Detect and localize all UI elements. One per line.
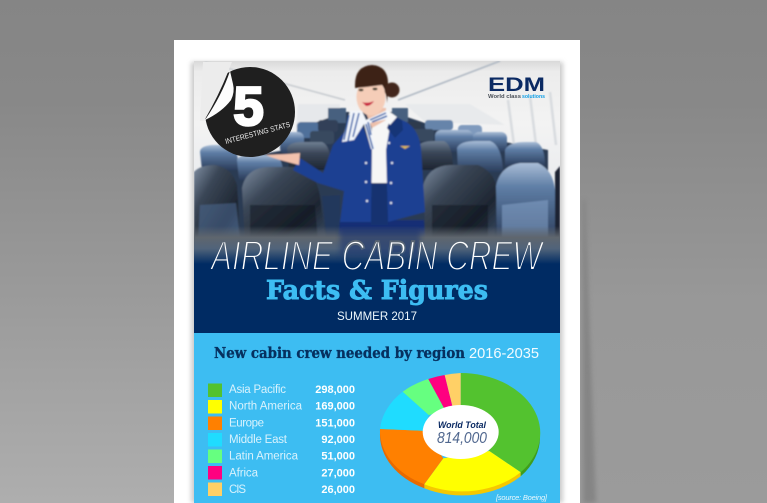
eyes and smile bbox=[358, 89, 364, 91]
legend row: North America: North America bbox=[229, 401, 303, 413]
donut chart bbox=[380, 373, 540, 495]
legend row: CIS bbox=[208, 482, 355, 496]
legend row: Asia Pacific bbox=[208, 384, 355, 397]
jacket buttons and wings pin bbox=[365, 142, 393, 204]
white sheet bbox=[174, 40, 580, 503]
hero photo: airplane cabin with flight attendant bbox=[194, 61, 560, 272]
slice: CIS bbox=[445, 373, 461, 407]
legend row: Africa: 27,000 bbox=[321, 467, 355, 479]
donut 3D edge bbox=[380, 429, 540, 495]
panel heading: New cabin crew needed by region bbox=[214, 344, 465, 362]
cut-away at peel bbox=[200, 62, 232, 121]
hair bbox=[355, 65, 388, 103]
jacket left panel and sleeve bbox=[293, 124, 372, 222]
slice: North America bbox=[424, 451, 521, 491]
jacket right panel and sleeve bbox=[386, 115, 425, 222]
legend row: North America bbox=[208, 400, 355, 414]
world total value: 814,000 bbox=[437, 430, 487, 447]
legend row: CIS: 26,000 bbox=[321, 484, 355, 496]
legend bbox=[208, 384, 355, 496]
striped scarf bbox=[342, 110, 388, 150]
legend row: Asia Pacific: Asia Pacific bbox=[229, 384, 286, 396]
legend row: Europe: Europe bbox=[229, 417, 264, 429]
slice: Africa bbox=[428, 375, 453, 412]
sticker: 5 interesting stats bbox=[200, 62, 295, 157]
slice: Asia Pacific bbox=[461, 373, 540, 472]
slice: Middle East bbox=[380, 392, 429, 431]
skirt bbox=[339, 220, 425, 234]
shirt bbox=[370, 120, 390, 184]
open palm bbox=[266, 153, 300, 165]
far rows of seats bbox=[280, 108, 507, 154]
legend row: Europe: 151,000 bbox=[315, 417, 355, 429]
face bbox=[356, 78, 386, 116]
legend row: Middle East: 92,000 bbox=[321, 434, 355, 446]
legend row: Latin America: Latin America bbox=[229, 451, 299, 463]
legend row: Latin America: 51,000 bbox=[321, 451, 355, 463]
peeled corner bbox=[205, 71, 234, 120]
neck and collar bbox=[364, 108, 386, 128]
legend row: Latin America bbox=[208, 450, 355, 463]
logo: EDM: World class bbox=[488, 94, 521, 100]
panel heading: 2016-2035 bbox=[469, 345, 539, 362]
front row seats bbox=[194, 163, 560, 242]
donut hole bbox=[423, 405, 499, 459]
panel: new cabin crew by region bbox=[194, 333, 560, 503]
logo: EDM: solutions bbox=[522, 94, 545, 100]
legend row: Asia Pacific: 298,000 bbox=[315, 384, 355, 396]
legend row: Middle East: Middle East bbox=[229, 434, 288, 446]
legend row: Africa: Africa bbox=[229, 467, 259, 479]
interesting stats label: INTERESTING STATS bbox=[224, 120, 291, 146]
bottom fade of photo bbox=[194, 227, 560, 264]
world total label: World Total bbox=[438, 420, 486, 430]
title: Airline Cabin Crew: AIRLINE CABIN CREW bbox=[209, 232, 545, 279]
legend row: Middle East bbox=[208, 433, 355, 446]
cabin ceiling and window wall bbox=[205, 61, 556, 145]
legend row: CIS: CIS bbox=[229, 484, 246, 496]
legend row: North America: 169,000 bbox=[315, 401, 355, 413]
slice: Europe bbox=[380, 429, 443, 484]
middle rows of seats bbox=[199, 140, 546, 180]
legend row: Africa bbox=[208, 466, 355, 480]
poster shadow bbox=[191, 62, 563, 503]
subtitle: Facts & Figures: Facts & Figures bbox=[266, 276, 488, 306]
legend row: Europe bbox=[208, 416, 355, 430]
jacket skirt front bbox=[371, 183, 388, 225]
logo: EDM: EDM bbox=[488, 75, 545, 96]
source note: [source: Boeing] bbox=[495, 493, 548, 502]
flight attendant bbox=[266, 64, 426, 234]
logo: EDM bbox=[488, 75, 545, 100]
dark seat backing bbox=[226, 110, 549, 237]
date: Summer 2017: SUMMER 2017 bbox=[337, 309, 417, 323]
number 5: 5 bbox=[233, 75, 264, 137]
navy title band bbox=[194, 264, 560, 333]
slice: Latin America bbox=[403, 379, 446, 415]
